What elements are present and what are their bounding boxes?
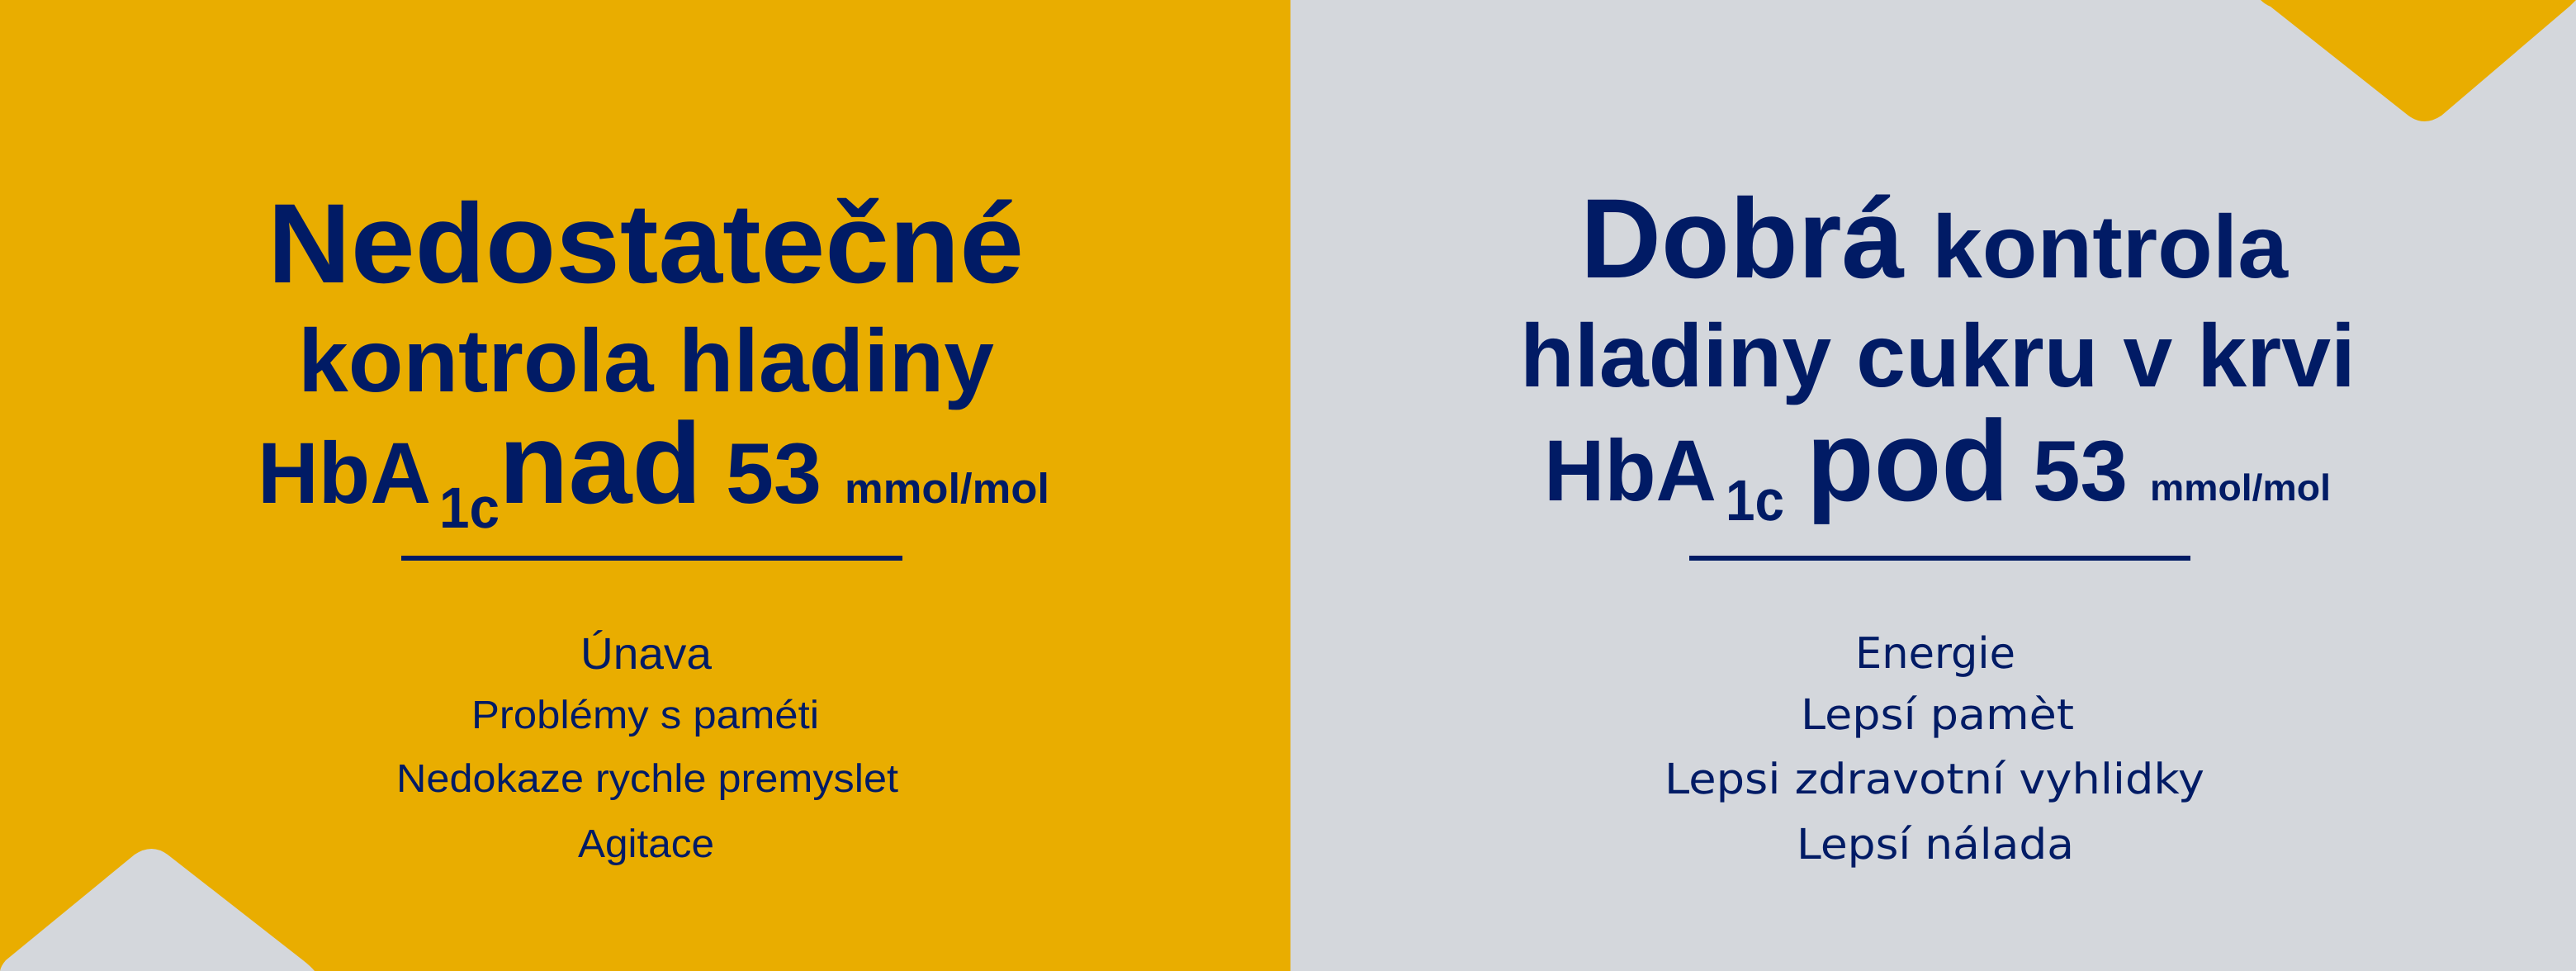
heading: poor control: 1c: [439, 476, 500, 540]
heading: poor control: 53: [726, 426, 822, 522]
heading: poor control: HbA: [258, 425, 431, 522]
benefit list: good control: Lepsi zdravotní vyhlidky: [1664, 755, 2204, 804]
heading: poor control: kontrola hladiny: [298, 310, 994, 410]
left divider rule: [401, 556, 902, 561]
symptom list: poor control: Nedokaze rychle premyslet: [396, 757, 898, 801]
panel: good control: [1520, 0, 2576, 869]
heading: good control: pod: [1807, 397, 2009, 525]
benefit list: good control: Energie: [1855, 629, 2015, 679]
heading: poor control: nad: [499, 400, 702, 528]
heading: poor control: Nedostatečné: [268, 181, 1024, 307]
heading: good control: [1520, 176, 2356, 533]
decorative gold corner shape: [2261, 0, 2576, 121]
heading: good control: 53: [2033, 424, 2128, 519]
panel: poor control: [0, 0, 1290, 971]
heading: poor control: [258, 181, 1049, 540]
left panel background: [0, 0, 1290, 971]
heading: good control: mmol/mol: [2150, 467, 2331, 509]
heading: good control: 1c: [1726, 468, 1784, 533]
decorative grey corner shape: [0, 849, 315, 971]
symptom list: poor control: Agitace: [578, 822, 714, 866]
heading: good control: HbA: [1544, 423, 1717, 519]
benefit list: good control: [1664, 629, 2204, 869]
benefit list: good control: Lepsí pamèt: [1801, 691, 2074, 740]
heading: good control: kontrola: [1932, 197, 2289, 296]
right divider rule: [1689, 556, 2190, 561]
benefit list: good control: Lepsí nálada: [1797, 821, 2074, 869]
heading: good control: hladiny cukru v krvi: [1520, 306, 2356, 405]
heading: poor control: mmol/mol: [845, 465, 1049, 512]
symptom list: poor control: [396, 629, 898, 866]
symptom list: poor control: Únava: [580, 629, 713, 679]
heading: good control: Dobrá: [1580, 176, 1905, 302]
symptom list: poor control: Problémy s paméti: [471, 694, 819, 737]
